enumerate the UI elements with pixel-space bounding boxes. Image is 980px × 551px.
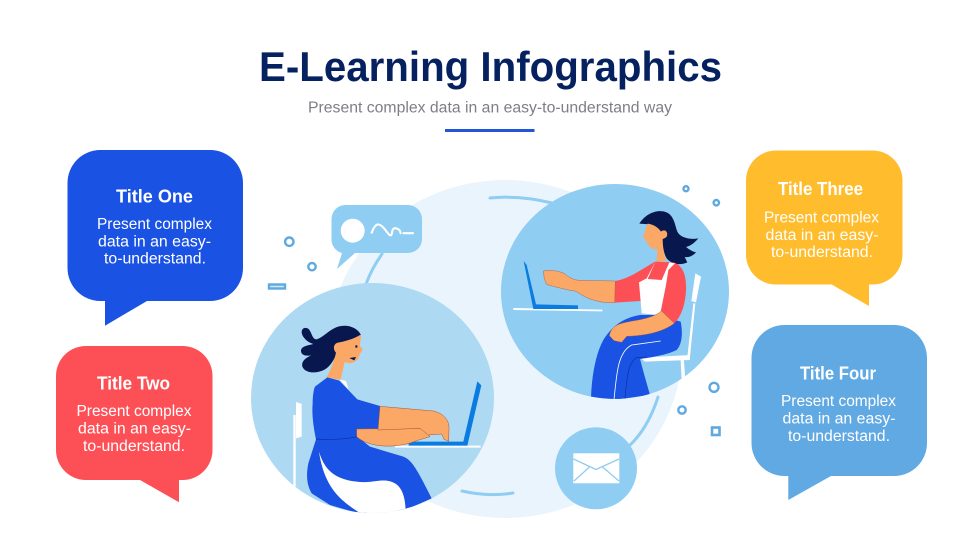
title: E-Learning Infographics <box>259 43 722 90</box>
panel: title two: to-understand. <box>83 438 185 455</box>
panel: title three: Present complex <box>764 209 879 226</box>
desk and laptop <box>395 446 481 448</box>
decorative markers right <box>678 186 720 435</box>
panel: title four: to-understand. <box>788 428 890 445</box>
chat bubble icon <box>331 205 422 269</box>
skin: head and neck <box>643 224 667 262</box>
panel: title three: Title Three <box>778 178 863 199</box>
title underline <box>445 129 534 132</box>
hair <box>301 326 361 372</box>
panel: title one: Title One <box>116 185 193 206</box>
skirt <box>591 315 682 400</box>
panel: title two <box>56 346 212 502</box>
red top <box>615 262 686 323</box>
panel: title one: Present complex <box>97 216 212 233</box>
arm far <box>357 428 430 446</box>
panel: title three <box>746 150 902 306</box>
face details <box>349 345 357 360</box>
panel: title one <box>68 150 243 326</box>
chair <box>640 273 701 382</box>
hair <box>639 211 698 264</box>
panel: title three: to-understand. <box>771 244 873 261</box>
arm near and hand <box>378 406 449 441</box>
panel: title four: data in an easy- <box>782 410 896 428</box>
apron <box>639 261 675 315</box>
envelope icon <box>555 427 637 509</box>
dress <box>307 377 432 513</box>
connector arcs <box>366 197 658 495</box>
panel: title two: data in an easy- <box>78 420 191 438</box>
left illustration: woman typing <box>251 283 494 513</box>
panel: title two: Present complex <box>76 403 192 420</box>
decorative markers left <box>269 238 316 288</box>
collar <box>339 379 349 389</box>
forearm on lap <box>609 311 674 342</box>
chair <box>293 402 302 487</box>
panel: title four: Title Four <box>800 362 876 383</box>
panel: title one: data in an easy- <box>98 234 211 250</box>
panel: title three: data in an easy- <box>766 227 878 244</box>
right illustration: woman at laptop <box>501 184 729 400</box>
panel: title four: Present complex <box>781 393 896 410</box>
background circle <box>328 180 682 518</box>
skin: head and neck <box>327 335 362 380</box>
arm reaching <box>543 270 615 303</box>
panel: title four <box>752 325 927 500</box>
desk and laptop <box>513 308 602 311</box>
subtitle: Present complex data in an easy-to-understand way <box>308 100 672 116</box>
panel: title one: to-understand. <box>104 250 206 268</box>
panel: title two: Title Two <box>97 372 170 393</box>
